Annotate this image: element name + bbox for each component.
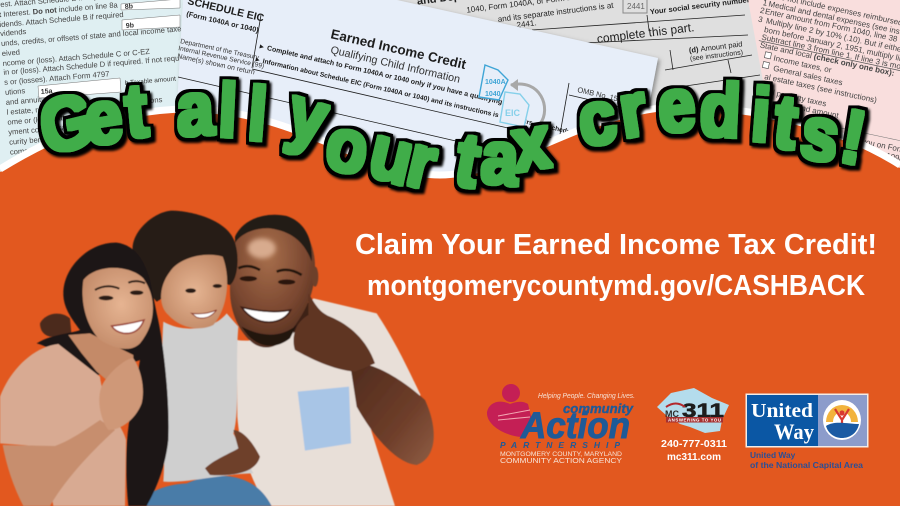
phone: 240-777-0311: [661, 438, 727, 450]
woman smile: [112, 320, 144, 333]
man beard: [242, 325, 297, 346]
Partnership wordmark: PARTNERSHIP: [500, 440, 625, 450]
woman neck: [68, 333, 133, 380]
MC311 wordmark: MC: [665, 409, 679, 419]
Schedule EIC text: Earned Income Credit: [329, 26, 468, 72]
man neck: [293, 300, 312, 333]
shirt pocket: [298, 387, 351, 451]
teal form: income lines: t Interest. Do not include on line 8a: [0, 0, 119, 19]
gray form: child and dependent care: (see instructions): [690, 49, 743, 63]
title: Get all your tax credits!: Get all your tax credits!: [33, 62, 872, 207]
teal form: income lines: unds, credits, or offsets of state and local income taxes: [1, 24, 186, 48]
tagline: Helping People. Changing Lives.: [538, 391, 635, 400]
agency line: COMMUNITY ACTION AGENCY: [500, 458, 622, 465]
teal form: income lines: the amounts: [10, 154, 53, 167]
gray form: child and dependent care: [380, 0, 772, 135]
icon: 1040A to EIC documents: EIC: [505, 108, 521, 118]
teal form: income lines: vidends: [0, 27, 27, 38]
answering banner: [666, 417, 723, 422]
pink form: itemized deductions: al estate taxes (see instructions): [764, 72, 878, 105]
woman eyes: [99, 290, 143, 300]
icon: county map: [657, 388, 729, 433]
man hand: [294, 293, 375, 372]
logo: MC311: 311: [682, 401, 725, 422]
pink form: itemized deductions: [735, 0, 900, 190]
icon: 1040A to EIC documents: 1040: [485, 91, 501, 98]
chapter name: United Way: [750, 450, 796, 460]
logo: MC311: ANSWERING TO YOU: [668, 418, 721, 422]
background: orange field with white wave edge: [0, 110, 900, 506]
child eyes: [185, 284, 222, 293]
gray form: child and dependent care: complete this part.: [596, 20, 695, 46]
woman hair: [37, 243, 169, 506]
url: mc311.com: [667, 451, 721, 463]
woman hand: [99, 358, 143, 430]
logo: Community Action Partnership: [487, 384, 635, 465]
man forehead highlight: [248, 238, 276, 258]
child face: [161, 255, 227, 328]
teal form: income lines: 8b: [125, 3, 133, 11]
man mouth: [242, 307, 291, 322]
heading: Claim Your Earned Income Tax Credit!: Claim Your Earned Income Tax Credit!: [355, 229, 877, 261]
gray form: child and dependent care: 2441: [627, 2, 645, 11]
Schedule EIC text: OMB No. 1545-0074: [577, 85, 646, 109]
teal form: income lines: come. List type and amount: [10, 140, 104, 157]
Schedule EIC text: ► Information about Schedule EIC (Form 1040A or 1040) and its instructions is at www.irs.gov/scheduleeic.: [254, 56, 588, 140]
pink form: itemized deductions: al property taxes: [767, 87, 827, 108]
woman shirt: [0, 344, 126, 506]
teal form: income lines: 15a: [41, 88, 53, 96]
teal form: income lines: l estate, royalties, partnerships, S corporations: [6, 95, 163, 117]
child smile: [192, 310, 217, 318]
woman face: [82, 268, 153, 349]
gray form: child and dependent care: 2441.: [516, 18, 537, 30]
community wordmark: community: [563, 401, 634, 416]
Schedule EIC text: (Form 1040A or 1040): [186, 9, 260, 35]
teal form: income lines: utions: [5, 86, 26, 97]
United Way wordmark: United: [751, 400, 813, 422]
Schedule EIC text: Attachment: [570, 129, 606, 144]
man hand behind woman: [40, 314, 72, 337]
pink form: itemized deductions: State and local (check only one box):: [759, 41, 895, 78]
icon: 1040A to EIC documents: [479, 65, 545, 127]
teal form: income lines: b Taxable amount: [125, 76, 176, 87]
teal form: income lines: curity benefits: [9, 134, 56, 147]
pink form: itemized deductions: types and amount: [775, 98, 840, 120]
pink form: itemized deductions: 2: [759, 6, 766, 16]
icon: rainbow, person and hand: [823, 400, 861, 440]
pink form: itemized deductions: 3: [757, 15, 764, 24]
teal form: income lines: 9b: [126, 22, 134, 30]
teal form: income lines: s or (losses). Attach Form 4797: [4, 69, 110, 87]
logo: United Way: of the National Capital Area: [750, 460, 863, 470]
photo: smiling family illustration: [0, 211, 434, 506]
icon: heart with hands: [487, 384, 533, 437]
Action wordmark: Action: [520, 405, 630, 446]
Schedule EIC text: Qualifying Child Information: [329, 44, 461, 86]
gray form: child and dependent care: and its separate instructions is at: [497, 1, 615, 24]
woman arm: [3, 420, 115, 506]
man hand on child: [205, 430, 260, 475]
Schedule EIC text: ► Complete and attach to Form 1040A or 1040 only if you have a qualifying child.: [258, 43, 523, 111]
teal form: income lines: [0, 0, 241, 190]
county line: MONTGOMERY COUNTY, MARYLAND: [500, 451, 623, 458]
icon: 1040A to EIC documents: 1040A: [485, 79, 506, 86]
teal form: income lines: ncome or (loss). Attach Schedule C or C-EZ: [2, 47, 151, 68]
logo: United Way: Way: [774, 419, 814, 444]
teal form: income lines: yment compensation: [8, 122, 79, 137]
gray form: child and dependent care: (d) Amount paid: [688, 39, 743, 55]
logo: MC311: [657, 388, 729, 463]
child hair: [133, 211, 238, 302]
man head: [230, 215, 315, 347]
man arm: [350, 363, 434, 465]
Schedule EIC text: [177, 0, 650, 165]
Schedule EIC text: Internal Revenue Service (99): [178, 45, 265, 70]
blue form: Schedule EIC: [172, 0, 658, 195]
teal form: income lines: idends. Attach Schedule B if required: [0, 10, 124, 29]
panel: tax forms collage: [0, 0, 900, 195]
text: website: montgomerycountymd.gov/CASHBACK: [367, 270, 865, 302]
Schedule EIC text: Department of the Treasury: [180, 38, 260, 62]
man eyes: [240, 276, 295, 285]
pink form: itemized deductions: Income taxes, or: [773, 54, 833, 75]
teal form: income lines: eived: [1, 48, 20, 58]
teal form: income lines: ome or (loss). Attach Schedule F: [7, 109, 118, 127]
pink form: itemized deductions: Enter amount from Form 1040, line 38: [764, 7, 899, 44]
Schedule EIC text: Name(s) shown on return: [177, 53, 255, 76]
teal form: income lines: in or (loss). Attach Schedule D if required. If not required, check here: [3, 49, 233, 77]
logo: United Way: [746, 394, 868, 470]
jeans: [137, 476, 272, 506]
man hair: [235, 215, 312, 262]
man shirt: [237, 298, 421, 506]
child shirt: [162, 313, 253, 482]
pink form: itemized deductions: General sales taxes: [772, 64, 844, 87]
teal form: income lines: and annuities: [5, 94, 51, 107]
